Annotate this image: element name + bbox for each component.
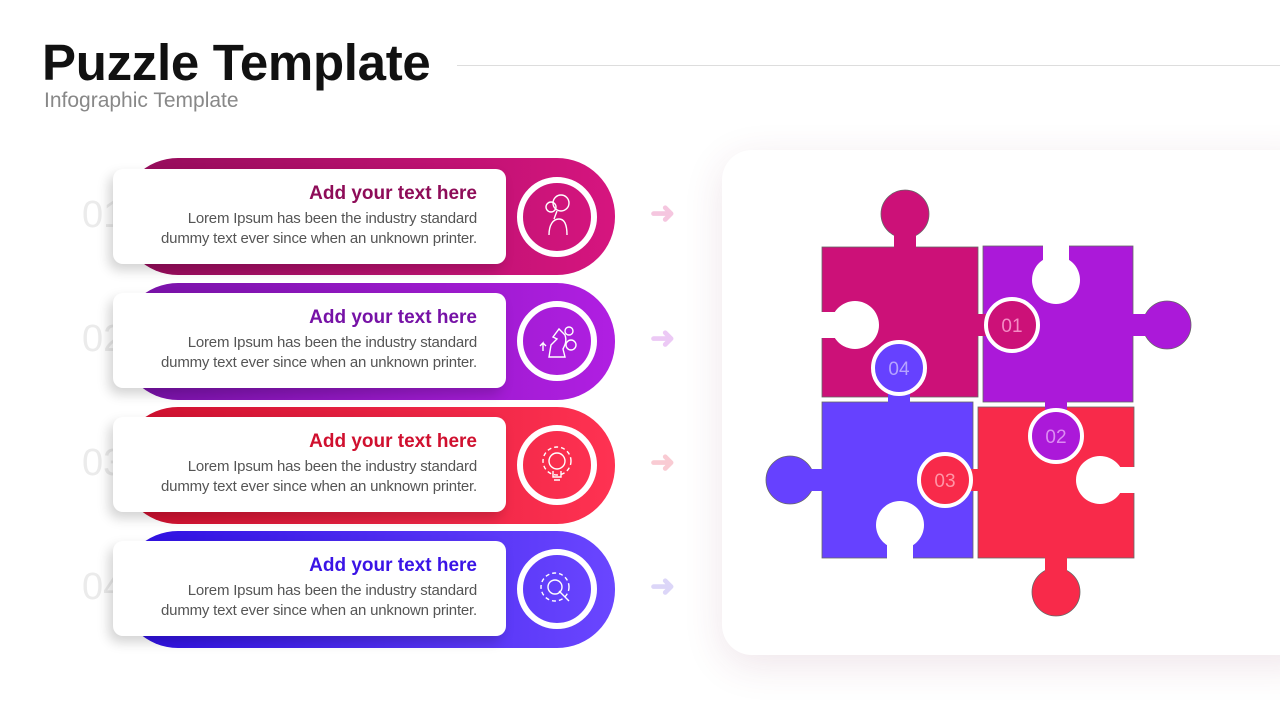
card 4 (113, 541, 506, 636)
card 2: Add your text here (309, 307, 477, 328)
card 3: dummy text ever since when an unknown printer. (161, 478, 477, 495)
puzzle chart: 02 (1045, 427, 1067, 448)
piece 3 (978, 407, 1134, 616)
arrow 2: ➜ (650, 322, 675, 355)
arrow 1: ➜ (650, 197, 675, 230)
card 3 (113, 417, 506, 512)
arrow 4: ➜ (650, 570, 675, 603)
icon 2 (517, 301, 597, 381)
card 2: Lorem Ipsum has been the industry standard (188, 334, 477, 351)
card 1: dummy text ever since when an unknown printer. (161, 230, 477, 247)
puzzle chart: 01 (1001, 316, 1023, 337)
icon 1 (517, 177, 597, 257)
number 03: 03 (82, 442, 124, 484)
icon 3 (517, 425, 597, 505)
title: Puzzle Template (42, 34, 430, 91)
interlocking knobs (873, 299, 1082, 506)
card 4: Lorem Ipsum has been the industry standard (188, 582, 477, 599)
panel: puzzle (722, 150, 1280, 655)
card 3: Add your text here (309, 431, 477, 452)
piece 2 (983, 246, 1191, 402)
pill 2 (120, 283, 615, 400)
number 02: 02 (82, 318, 124, 360)
piece 4 (766, 402, 973, 558)
number 04: 04 (82, 566, 124, 608)
pill 4 (120, 531, 615, 648)
icon 4 (517, 549, 597, 629)
pill 1 (120, 158, 615, 275)
puzzle chart: 03 (934, 471, 956, 492)
card 2 (113, 293, 506, 388)
card 2: dummy text ever since when an unknown printer. (161, 354, 477, 371)
puzzle chart: 04 (888, 359, 910, 380)
number 01: 01 (82, 194, 124, 236)
card 1 (113, 169, 506, 264)
card 4: dummy text ever since when an unknown printer. (161, 602, 477, 619)
subtitle: Infographic Template (44, 89, 239, 112)
piece 1 (822, 190, 978, 397)
arrow 3: ➜ (650, 446, 675, 479)
pill 3 (120, 407, 615, 524)
card 4: Add your text here (309, 555, 477, 576)
card 3: Lorem Ipsum has been the industry standard (188, 458, 477, 475)
card 1: Add your text here (309, 183, 477, 204)
holes (820, 244, 1136, 560)
card 1: Lorem Ipsum has been the industry standard (188, 210, 477, 227)
